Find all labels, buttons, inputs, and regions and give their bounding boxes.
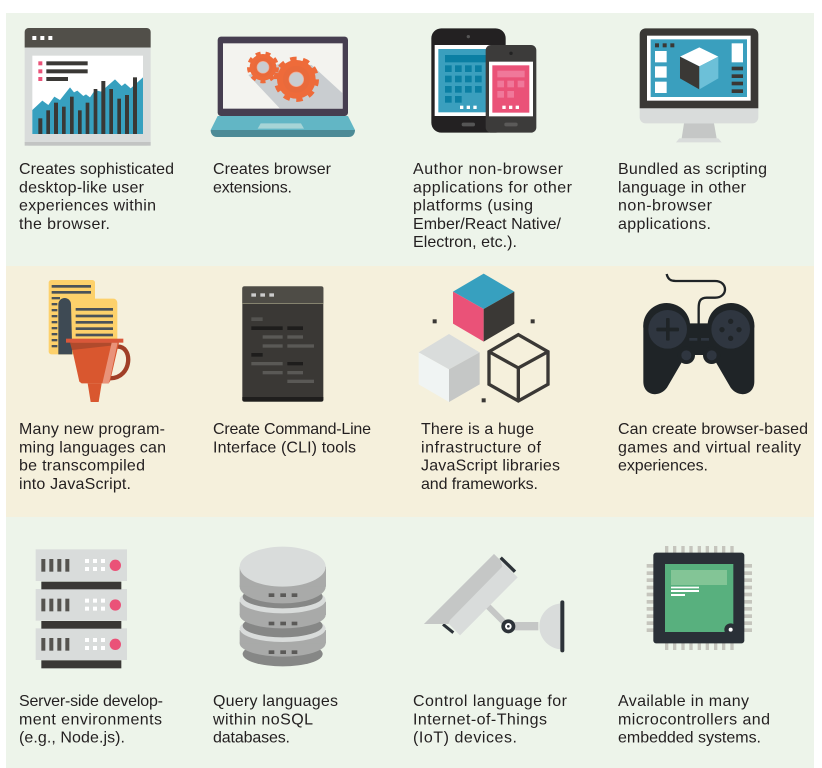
text: non-browser applications: Author non-browser [413, 161, 564, 178]
icon: laptop with gears [211, 37, 355, 137]
text: CLI tools: Create Command-Line [213, 421, 371, 438]
text: noSQL query languages: databases. [213, 730, 290, 746]
icon: library cubes [419, 274, 548, 402]
text: IoT control language: (IoT) devices. [413, 730, 517, 746]
text: non-browser applications: applications for other [413, 179, 573, 196]
text: IoT control language: Control language for [413, 693, 568, 710]
text: server-side environments: Server-side develop- [19, 693, 163, 710]
text: transcompiled languages: Many new program- [19, 421, 165, 438]
text: transcompiled languages [19, 421, 166, 493]
text: server-side environments: (e.g., Node.js). [19, 730, 125, 746]
text: games and VR: experiences. [618, 458, 708, 474]
text: non-browser applications [413, 161, 573, 251]
text: desktop-like experiences [19, 161, 174, 233]
text: games and VR [618, 421, 808, 474]
text: desktop-like experiences: desktop-like user [19, 179, 145, 196]
panel: top row [6, 13, 814, 266]
text: noSQL query languages: within noSQL [212, 711, 313, 728]
text: desktop-like experiences: Creates sophisticated [19, 161, 174, 178]
text: non-browser applications: Electron, etc.). [413, 234, 517, 251]
text: IoT control language [413, 693, 568, 746]
text: scripting language: Bundled as scripting [618, 161, 767, 178]
text: scripting language: applications. [618, 216, 711, 233]
text: microcontrollers [618, 693, 770, 746]
text: browser extensions: extensions. [213, 179, 292, 196]
text: scripting language: non-browser [618, 198, 713, 214]
text: libraries and frameworks: There is a huge [421, 421, 534, 438]
text: noSQL query languages [212, 693, 338, 746]
text: browser extensions: Creates browser [213, 161, 332, 178]
text: scripting language: language in other [618, 179, 747, 196]
text: libraries and frameworks: JavaScript libraries [421, 458, 560, 474]
text: scripting language [618, 161, 767, 233]
icon: tablet and phone [431, 28, 536, 133]
text: libraries and frameworks [421, 421, 560, 493]
icon: game controller [643, 274, 754, 394]
text: transcompiled languages: ming languages can [19, 439, 166, 456]
text: libraries and frameworks: and frameworks. [421, 476, 538, 493]
text: server-side environments [19, 693, 163, 746]
icon: documents and funnel [49, 280, 128, 402]
text: microcontrollers: Available in many [618, 693, 749, 710]
text: noSQL query languages: Query languages [213, 693, 338, 710]
icon: database stack [240, 547, 326, 666]
text: non-browser applications: Ember/React Native/ [413, 216, 562, 233]
text: CLI tools [213, 421, 371, 456]
text: server-side environments: ment environments [19, 711, 162, 728]
panel: bottom row [6, 517, 814, 768]
text: non-browser applications: platforms (using [413, 198, 533, 214]
text: desktop-like experiences: experiences within [19, 198, 156, 214]
text: games and VR: games and virtual reality [618, 439, 801, 456]
text: transcompiled languages: into JavaScript. [19, 476, 131, 493]
icon: desktop monitor with cube [640, 28, 758, 142]
text: CLI tools: Interface (CLI) tools [213, 439, 356, 456]
panel: middle row [6, 266, 814, 517]
icon: browser window with chart [25, 28, 151, 146]
text: transcompiled languages: be transcompiled [19, 458, 145, 474]
icon: server rack [36, 549, 127, 668]
icon: command-line window [242, 286, 323, 402]
text: games and VR: Can create browser-based [618, 421, 808, 438]
text: browser extensions [213, 161, 332, 196]
text: microcontrollers: microcontrollers and [618, 711, 770, 728]
icon: microcontroller chip [647, 546, 752, 650]
icon: security camera [424, 554, 562, 650]
text: microcontrollers: embedded systems. [618, 730, 761, 746]
text: desktop-like experiences: the browser. [19, 216, 110, 233]
text: libraries and frameworks: infrastructure of [421, 439, 542, 456]
text: IoT control language: Internet-of-Things [413, 711, 547, 728]
